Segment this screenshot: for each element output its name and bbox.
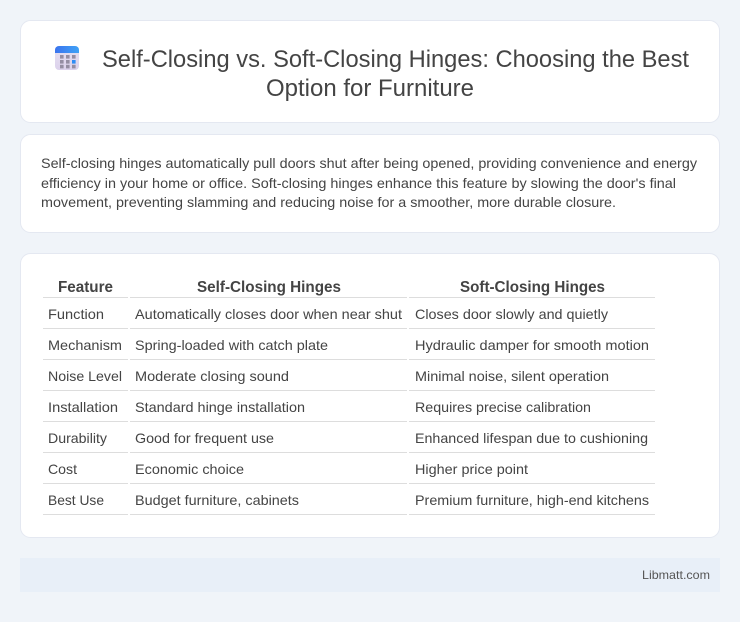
footer text: Libmatt.com [642,568,710,582]
intro text: Self-closing hinges automatically pull doors shut after being opened, providing convenience and energy [41,155,697,171]
row: cost [48,461,528,477]
row: cost: Economic choice [135,461,244,477]
row: cost: Cost [48,461,77,477]
row: mechanism: Hydraulic damper for smooth motion [415,337,649,353]
row: noise level: Moderate closing sound [135,368,289,384]
row: function: Closes door slowly and quietly [415,306,608,322]
row: noise level: Noise Level [48,368,122,384]
row: best use: Best Use [48,492,104,508]
panel: comparison table [20,254,720,538]
intro text: movement, preventing slamming and reducing noise for a smoother, more durable closure. [41,194,616,210]
row: cost: Higher price point [415,461,528,477]
heading: Self-Closing vs. Soft-Closing Hinges: Choosing the Best [102,46,689,73]
table header: Soft-Closing Hinges [460,279,605,296]
intro text [41,155,697,210]
footer [20,558,720,592]
table header [58,279,605,296]
heading [102,46,689,102]
row: function [48,306,608,322]
row: durability: Good for frequent use [135,430,274,446]
table header: Self-Closing Hinges [197,279,341,296]
row: durability: Durability [48,430,107,446]
table header: Feature [58,279,113,296]
row: noise level: Minimal noise, silent operation [415,368,609,384]
row: mechanism: Mechanism [48,337,122,353]
panel: title [20,20,720,122]
icon: calendar [55,46,79,70]
row: installation: Requires precise calibration [415,399,591,415]
row: mechanism: Spring-loaded with catch plate [135,337,328,353]
row: best use: Budget furniture, cabinets [135,492,299,508]
row: best use: Premium furniture, high-end kitchens [415,492,649,508]
panel: introduction [20,134,720,232]
heading: Option for Furniture [266,75,474,102]
row: mechanism [48,337,649,353]
row: noise level [48,368,609,384]
row: durability: Enhanced lifespan due to cushioning [415,430,648,446]
row: installation: Installation [48,399,118,415]
row: best use [48,492,649,508]
row: installation: Standard hinge installation [135,399,305,415]
row: function: Automatically closes door when near shut [135,306,402,322]
row: function: Function [48,306,104,322]
row: durability [48,430,648,446]
intro text: efficiency in your home or office. Soft-closing hinges enhance this feature by slowing the door's final [41,175,676,191]
row: installation [48,399,591,415]
